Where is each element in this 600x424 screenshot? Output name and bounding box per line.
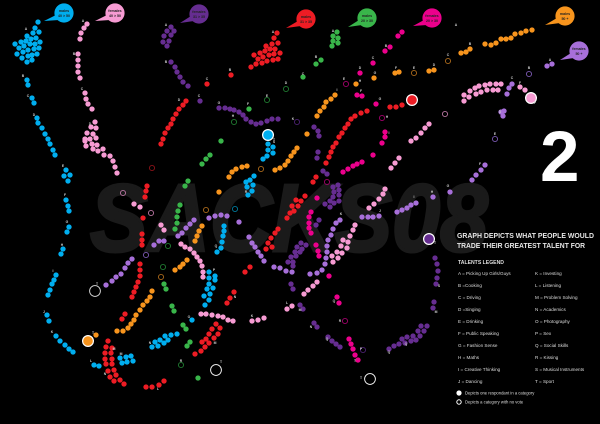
talents legend: J = Dancing (458, 379, 483, 384)
talents legend: F = Public Speaking (458, 331, 499, 336)
series: males 40-50 cyan (12, 19, 276, 369)
bubble: males 31 > 35 (286, 9, 316, 29)
bubble: males 50 +: 50 + (561, 17, 569, 21)
talents legend: S = Musical Instruments (535, 367, 585, 372)
category letter labels: H (386, 115, 389, 119)
talents legend: A = Picking Up Girls/Guys (458, 271, 511, 276)
category letter labels: G (218, 101, 221, 105)
category letter labels: C (198, 94, 201, 98)
category letter labels: G (447, 184, 450, 188)
category letter labels: L (286, 301, 288, 305)
category letter labels: T (354, 359, 357, 363)
bubble: males 40 > 50: 40 > 50 (58, 14, 70, 18)
category letter labels: C (511, 76, 514, 80)
category letter labels: A (25, 27, 28, 31)
category letter labels: B (165, 60, 168, 64)
category letter labels: B (22, 74, 25, 78)
category letter labels: Q (215, 244, 218, 248)
bubble: females 31 > 35: 31 > 35 (193, 15, 205, 19)
category letter labels (22, 19, 552, 391)
category letter labels: B (73, 52, 76, 56)
large number 2: 2 (540, 118, 580, 197)
category letter labels: M (214, 341, 217, 345)
bubble: females 20 > 30: females (425, 14, 439, 18)
talents legend: T = Sport (535, 379, 555, 384)
bubble: females 20 > 30: 20 > 30 (426, 19, 438, 23)
category letter labels: H (61, 243, 64, 247)
category letter labels: R (339, 319, 342, 323)
category letter labels: E (62, 164, 65, 168)
category letter labels: E (413, 66, 416, 70)
category letter labels: T (273, 138, 276, 142)
category letter labels: G (379, 97, 382, 101)
category letter labels: D (33, 113, 36, 117)
category letter labels: E (266, 94, 269, 98)
bubble: males 40 > 50 (44, 3, 74, 23)
bubble: females 40 > 50: females (108, 9, 122, 13)
category letter labels: G (66, 220, 69, 224)
talents legend: TALENTS LEGEND (458, 260, 504, 266)
category letter labels: H (359, 79, 362, 83)
category letter labels: R (180, 359, 183, 363)
talents legend: K = Investing (535, 271, 562, 276)
watermark: SACKS08: SACKS08 (90, 165, 489, 272)
talents legend: B =Cooking (458, 283, 482, 288)
talents legend: E = Drinking (458, 319, 484, 324)
category letter labels: T (220, 360, 223, 364)
category letter labels: F (395, 66, 397, 70)
bubble: females 31 > 35: females (192, 10, 206, 14)
talents legend: G = Fashion Sense (458, 343, 498, 348)
category letter labels: H (232, 114, 235, 118)
category letter labels: L (157, 387, 159, 391)
talents legend: Q = Social Skills (535, 343, 569, 348)
talents legend: N = Academics (535, 307, 566, 312)
talents legend: C = Driving (458, 295, 481, 300)
category letter labels: A (165, 23, 168, 27)
category letter labels: L (90, 359, 92, 363)
bubble: males 40 > 50: males (59, 9, 69, 13)
category letter labels: F (360, 89, 362, 93)
bubble: females 40 > 50 (95, 3, 125, 23)
category letter labels: D (178, 98, 181, 102)
category letter labels: F (519, 81, 521, 85)
talents legend: P = Sex (535, 331, 552, 336)
bubble: males 31 > 35: males (301, 15, 311, 19)
bubble: males 50 +: males (560, 12, 570, 16)
no-vote rings (90, 58, 532, 384)
category letter labels: T (96, 282, 99, 286)
category letter labels: M (120, 352, 123, 356)
single-respondent large nodes (83, 93, 536, 346)
category letter labels: C (81, 87, 84, 91)
heading (457, 231, 594, 250)
category letter labels: F (64, 193, 66, 197)
category letter labels: I (414, 195, 415, 199)
category letter labels: K (292, 117, 295, 121)
category letter labels: M (299, 308, 302, 312)
category letter labels: K (340, 212, 343, 216)
category letter labels: N (104, 372, 107, 376)
heading: TRADE THEIR GREATEST TALENT FOR (457, 241, 585, 250)
category letter labels: T (92, 331, 95, 335)
category letter labels: Q (405, 342, 408, 346)
talents legend: Depicts one respondant in a category (465, 391, 535, 396)
category letter labels: N (149, 341, 152, 345)
series: females 20-30 magenta (306, 29, 405, 363)
talents legend: R = Kissing (535, 355, 559, 360)
category letter labels: C (206, 77, 209, 81)
category letter labels: I (337, 88, 338, 92)
category letter labels: E (494, 132, 497, 136)
category letter labels: B (385, 44, 388, 48)
category letter labels: Q (326, 337, 329, 341)
category letter labels: A (82, 19, 85, 23)
bubble: females 20 > 30 (413, 8, 442, 28)
category letter labels: T (434, 241, 437, 245)
series: females 40-50 pink (75, 21, 528, 324)
bubble: females 31 > 35 (180, 4, 209, 24)
category letter labels: N (234, 295, 237, 299)
category letter labels: B (315, 55, 318, 59)
category letter labels: B (528, 66, 531, 70)
category letter labels: K (251, 314, 254, 318)
talents legend: Depicts a category with no vote (465, 400, 524, 405)
category letter labels: H (431, 190, 434, 194)
talents legend: O = Photography (535, 319, 571, 324)
bubble: females 50 +: females (572, 47, 586, 51)
series: males 20-30 green (161, 29, 341, 381)
series: females 31-35 dark purple (160, 24, 441, 352)
category letter labels: K (51, 330, 54, 334)
category letter labels: D (89, 122, 92, 126)
talents legend: D =Singing (458, 307, 481, 312)
category letter labels: Q (333, 299, 336, 303)
bubble: males 20 > 30: 20 > 30 (361, 19, 373, 23)
category letter labels: B (229, 68, 232, 72)
category letter labels: I (53, 269, 54, 273)
dot chart (12, 19, 555, 390)
category letter labels: O (188, 315, 191, 319)
category letter labels: S (273, 140, 276, 144)
category letter labels: T (360, 376, 363, 380)
category letter labels: D (499, 110, 502, 114)
category letter labels: A (332, 29, 335, 33)
category letter labels: M (435, 310, 438, 314)
category letter labels: I (389, 131, 390, 135)
category letter labels: F (479, 162, 481, 166)
talents legend: I = Creative Thinking (458, 367, 501, 372)
series: females 50+ light purple (103, 61, 555, 288)
category letter labels: C (302, 72, 305, 76)
category letter labels: M (113, 347, 116, 351)
bubble: males 20 > 30: males (362, 14, 372, 18)
category letter labels: C (372, 56, 375, 60)
category letter labels: D (359, 66, 362, 70)
bubble: males 50 + (545, 6, 575, 26)
category letter labels: A (455, 23, 458, 27)
category letter labels: J (43, 310, 45, 314)
category letter labels: P (360, 347, 363, 351)
bubble: females 50 +: 50 + (575, 52, 583, 56)
category letter labels: D (433, 63, 436, 67)
talents legend: H = Maths (458, 355, 480, 360)
category letter labels: S (438, 284, 441, 288)
category letter labels: N (310, 325, 313, 329)
category letter labels: A (549, 58, 552, 62)
bubble: females 40 > 50: 40 > 50 (109, 14, 121, 18)
age group bubbles (44, 3, 589, 61)
category letter labels: C (27, 94, 30, 98)
category letter labels: Q (388, 350, 391, 354)
category letter labels: G (374, 71, 377, 75)
talents legend: M = Problem Solving (535, 295, 578, 300)
talents legend (456, 260, 585, 405)
category letter labels: E (343, 77, 346, 81)
bubble: males 31 > 35: 31 > 35 (300, 20, 312, 24)
category letter labels: A (272, 30, 275, 34)
category letter labels: D (285, 81, 288, 85)
category letter labels: F (247, 102, 249, 106)
category letter labels: R (245, 190, 248, 194)
series: males 31-35 red (102, 30, 405, 390)
category letter labels: B (469, 42, 472, 46)
talents legend: L = Listening (535, 283, 561, 288)
category letter labels: J (379, 209, 381, 213)
category letter labels: P (213, 268, 216, 272)
category letter labels: F (534, 101, 536, 105)
category letter labels: C (447, 53, 450, 57)
bubble: females 50 + (560, 41, 589, 61)
bubble: males 20 > 30 (348, 8, 377, 28)
series: males 50+ orange (93, 27, 535, 338)
